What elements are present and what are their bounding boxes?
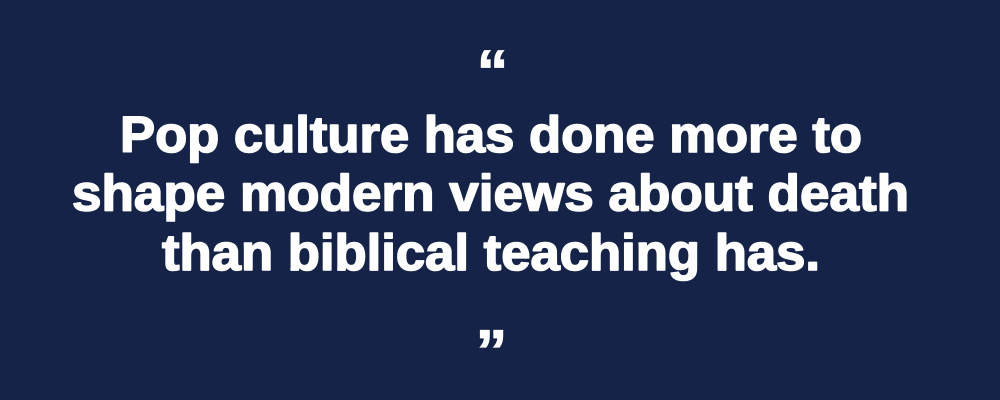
icon: closing quotation mark: ” — [476, 318, 508, 385]
quote text — [72, 106, 909, 281]
quote text: than biblical teaching has. — [162, 224, 820, 281]
quote text: Pop culture has done more to — [120, 106, 862, 163]
quote text: shape modern views about death — [72, 164, 909, 222]
icon: opening quotation mark: “ — [476, 38, 508, 105]
